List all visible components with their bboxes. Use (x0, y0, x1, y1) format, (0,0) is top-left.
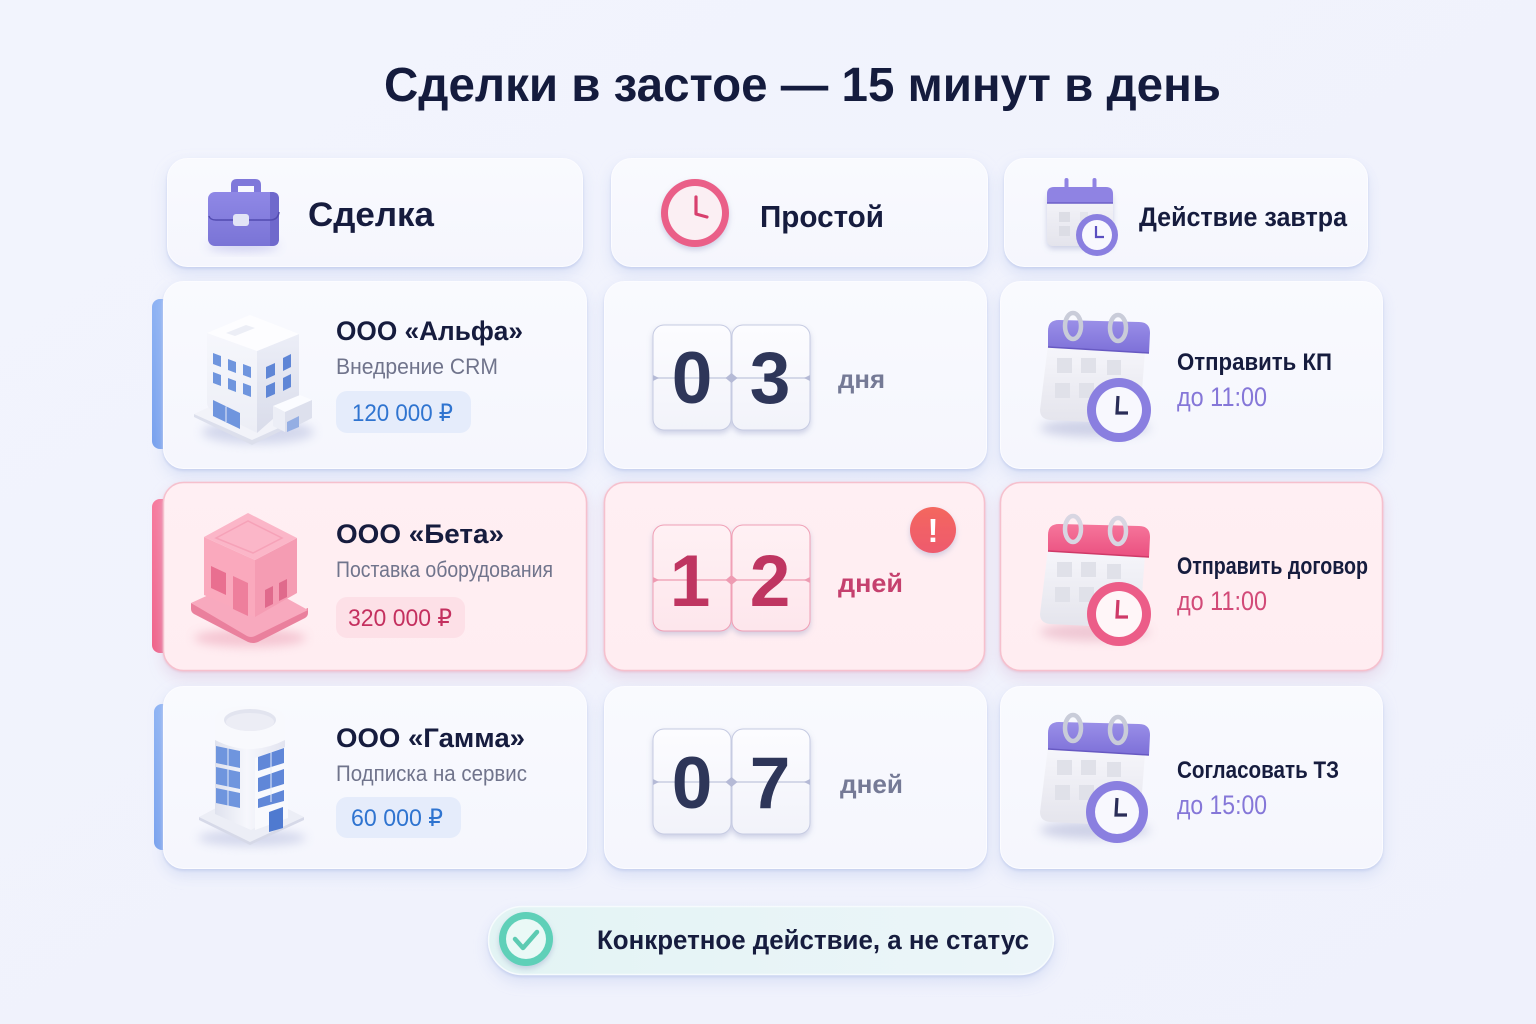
action text: Отправить договор (1177, 553, 1368, 580)
flip counter 03: 3 (750, 338, 790, 419)
action deadline: до 11:00 (1177, 382, 1267, 412)
flip counter 12 (653, 525, 810, 631)
icon: calendar with clock (1040, 715, 1150, 843)
header: Простой (612, 158, 988, 266)
deal name: ООО «Бета» (336, 519, 504, 549)
flip counter 12: 2 (750, 541, 790, 622)
action text: Согласовать ТЗ (1177, 757, 1339, 784)
icon: cylindrical tower (198, 706, 306, 846)
row 3: action card (1000, 686, 1382, 868)
header label: Простой (760, 199, 884, 234)
icon: calendar with clock (1040, 516, 1151, 646)
footer pill (488, 906, 1054, 974)
icon: clock (661, 179, 729, 247)
icon: pink building (191, 513, 308, 647)
row 3: downtime card (604, 686, 986, 868)
flip counter 03: 0 (672, 338, 712, 419)
deal name: ООО «Гамма» (336, 723, 525, 753)
action deadline: до 15:00 (1177, 790, 1267, 820)
row 2: accent bar (152, 499, 182, 653)
amount pill: 60 000 ₽ (351, 805, 443, 832)
icon: alert: ! (928, 512, 938, 549)
deal description: Внедрение CRM (336, 354, 498, 379)
flip counter 03 (653, 325, 810, 430)
deal name: ООО «Альфа» (336, 316, 523, 346)
title: Сделки в застое — 15 минут в день (384, 59, 1221, 112)
amount pill: 320 000 ₽ (348, 605, 452, 632)
icon: briefcase (207, 179, 279, 251)
row 3: deal card (164, 686, 586, 868)
amount pill (336, 597, 465, 638)
row 2: action card (1000, 482, 1382, 670)
deal description: Поставка оборудования (336, 557, 553, 582)
unit label: дней (840, 769, 903, 799)
amount pill (336, 797, 461, 838)
row 1: action card (1000, 282, 1382, 468)
action text: Отправить КП (1177, 349, 1332, 376)
deal description: Подписка на сервис (336, 761, 527, 786)
row 1: deal card (164, 282, 586, 468)
unit label: дней (838, 568, 903, 598)
flip counter 07 (653, 729, 810, 834)
icon: white office building (194, 315, 314, 445)
header label: Сделка (308, 196, 435, 234)
header: Действие завтра (1004, 158, 1368, 266)
flip counter 07: 7 (750, 743, 790, 824)
icon: calendar with clock (1040, 313, 1151, 442)
action deadline: до 11:00 (1177, 586, 1267, 616)
row 3: accent bar (154, 704, 184, 850)
header label: Действие завтра (1139, 202, 1348, 232)
icon: alert (910, 507, 956, 553)
row 1: downtime card (604, 282, 986, 468)
row 2: downtime card (604, 482, 984, 670)
footer text: Конкретное действие, а не статус (597, 925, 1029, 955)
row 1: accent bar (152, 299, 182, 449)
amount pill: 120 000 ₽ (352, 400, 453, 427)
flip counter 12: 1 (670, 541, 710, 622)
row 2: deal card (164, 482, 586, 670)
flip counter 07: 0 (672, 743, 712, 824)
unit label: дня (838, 364, 885, 394)
icon: check badge (499, 912, 553, 966)
header: Сделка (168, 158, 582, 266)
amount pill (336, 391, 471, 433)
icon: calendar with clock (1047, 178, 1118, 256)
